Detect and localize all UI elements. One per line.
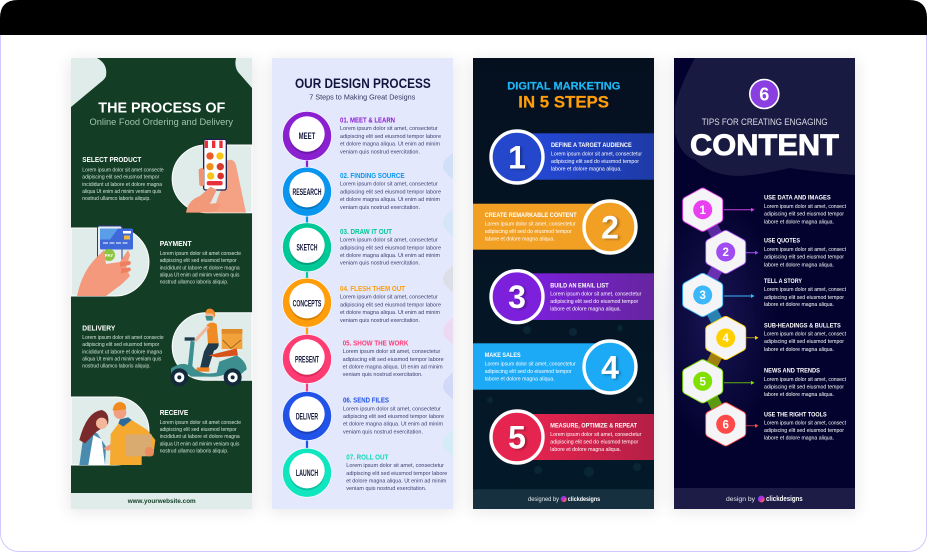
step text: payment: adipiscing elit sed eiusmod tempor — [160, 258, 237, 264]
step 2: RESEARCH — [292, 187, 322, 198]
tip 1 — [687, 193, 846, 227]
tip 6: adipiscing elit sed eiusmod tempor — [764, 428, 844, 434]
step 5 band: Lorem ipsum dolor sit amet, consectetur — [550, 432, 641, 438]
connectors — [306, 155, 308, 455]
step text: receive: incididunt ut labore et dolore magna — [160, 434, 240, 440]
tip 1: Lorem ipsum dolor sit amet, consect — [764, 204, 846, 210]
step 5 band: MEASURE, OPTIMIZE & REPEAT — [550, 423, 637, 430]
title: CONTENT — [690, 129, 839, 162]
step 4 band — [473, 341, 636, 393]
step 6: adipiscing elit sed eiusmod tempor labore — [343, 414, 444, 420]
step text: select product: nostrud ullamco laboris aliquip. — [82, 196, 151, 202]
step 5 band: 5 — [508, 420, 526, 456]
illustration: phone with food menu — [172, 139, 252, 213]
step 3 band: labore et dolore magna aliqua. — [550, 307, 621, 313]
tip 2: labore et dolore magna aliqua. — [764, 262, 834, 268]
step 3 band — [491, 271, 654, 323]
panel: digital marketing — [473, 58, 654, 509]
step 4: CONCEPTS — [293, 298, 321, 310]
illustration: delivery scooter — [170, 309, 252, 386]
title — [90, 100, 234, 127]
step text: payment: Lorem ipsum dolor sit amet consecte — [160, 251, 241, 257]
step 5 band: adipiscing elit sed do eiusmod tempor — [550, 439, 638, 445]
step text: receive — [160, 410, 241, 454]
step 3: et dolore magna aliqua. Ut enim ad minim — [340, 253, 441, 259]
step 1: MEET — [299, 131, 315, 142]
tip 5: labore et dolore magna aliqua. — [764, 392, 834, 398]
step 4 band: 4 — [601, 350, 619, 386]
step text: payment: nostrud ullamco laboris aliquip. — [160, 280, 228, 286]
step 3: adipiscing elit sed eiusmod tempor labore — [340, 246, 441, 252]
step text: select product — [82, 157, 164, 202]
tip 2: Lorem ipsum dolor sit amet, consect — [764, 247, 846, 253]
step text: select product: SELECT PRODUCT — [82, 157, 142, 164]
step 1 band: labore et dolore magna aliqua. — [551, 167, 622, 173]
tip 2: adipiscing elit sed eiusmod tempor — [764, 255, 844, 261]
tip 4: Lorem ipsum dolor sit amet, consect — [764, 332, 846, 338]
tip 3 — [687, 278, 846, 312]
title: DIGITAL MARKETING — [507, 80, 620, 92]
step 7: 07. ROLL OUT — [346, 452, 389, 461]
tip 6: labore et dolore magna aliqua. — [764, 436, 834, 442]
tip 6: USE THE RIGHT TOOLS — [764, 411, 827, 418]
step text: select product: aliqua Ut enim ad minim veniam quis — [82, 189, 162, 195]
step 6: veniam quis nostrud exercitation. — [343, 429, 423, 435]
tip 4: adipiscing elit sed eiusmod tempor — [764, 339, 844, 345]
step 2 band — [473, 201, 636, 253]
tip 5: NEWS AND TRENDS — [764, 368, 821, 375]
step 1: adipiscing elit sed eiusmod tempor labore — [340, 134, 441, 140]
tip 4: SUB-HEADINGS & BULLETS — [764, 323, 841, 330]
tip 3: TELL A STORY — [764, 278, 802, 285]
step text: delivery: adipiscing elit sed eiusmod tempor — [82, 342, 159, 348]
step 3 band: 3 — [508, 279, 526, 315]
step text: delivery: nostrud ullamco laboris aliquip. — [82, 364, 151, 370]
tip 2: 2 — [722, 247, 729, 259]
step 6: Lorem ipsum dolor sit amet, consectetur — [343, 406, 441, 412]
panel: content tips — [653, 58, 855, 509]
step 3: 03. DRAW IT OUT — [340, 227, 393, 236]
panel: food ordering process — [71, 58, 252, 509]
title: THE PROCESS OF — [98, 100, 225, 116]
step 2: 02. FINDING SOURCE — [340, 171, 405, 180]
tip 6 — [710, 407, 846, 442]
title: TIPS FOR CREATING ENGAGING — [702, 117, 828, 127]
step 1 — [282, 112, 441, 160]
step text: receive: Lorem ipsum dolor sit amet consecte — [160, 420, 241, 426]
step 1 band: Lorem ipsum dolor sit amet, consectetur — [551, 151, 642, 157]
step 5: veniam quis nostrud exercitation. — [343, 372, 423, 378]
tip 2: USE QUOTES — [764, 238, 800, 245]
step 6: DELIVER — [296, 411, 318, 422]
step text: payment: incididunt ut labore et dolore magna — [160, 266, 240, 272]
step 1 band: 1 — [508, 140, 526, 176]
tip 2 — [710, 235, 846, 269]
footer: designed by: designed by — [528, 497, 559, 503]
step 6 — [282, 392, 444, 440]
step 2: adipiscing elit sed eiusmod tempor labore — [340, 190, 441, 196]
tip 1: 1 — [699, 205, 706, 217]
step 7: LAUNCH — [296, 468, 318, 479]
step 1 band: adipiscing elit sed do eiusmod tempor — [551, 159, 639, 165]
step 4: veniam quis nostrud exercitation. — [340, 318, 420, 324]
badge: number 6 — [750, 80, 779, 108]
step 2 band: labore et dolore magna aliqua. — [485, 237, 555, 243]
footer: design by: clickdesigns — [766, 496, 803, 503]
step 1: et dolore magna aliqua. Ut enim ad minim — [340, 142, 441, 148]
step 1: 01. MEET & LEARN — [340, 115, 395, 124]
step 2 — [282, 167, 441, 216]
step 1: veniam quis nostrud exercitation. — [340, 149, 420, 155]
step 1: Lorem ipsum dolor sit amet, consectetur — [340, 126, 438, 132]
tip 3: adipiscing elit sed eiusmod tempor — [764, 295, 844, 301]
title: 7 Steps to Making Great Designs — [309, 92, 416, 101]
step text: select product: incididunt ut labore et dolore magna — [82, 182, 162, 188]
footer: website — [71, 493, 252, 509]
step text: receive: RECEIVE — [160, 410, 189, 417]
footer: designed by: clickdesigns — [568, 496, 601, 503]
step 2: Lorem ipsum dolor sit amet, consectetur — [340, 182, 438, 188]
step text: payment — [160, 241, 241, 286]
tip 3: Lorem ipsum dolor sit amet, consect — [764, 287, 846, 293]
step 4 band: MAKE SALES — [485, 352, 521, 359]
step 4: et dolore magna aliqua. Ut enim ad minim — [340, 310, 441, 316]
step text: payment: PAYMENT — [160, 241, 192, 248]
tip 1: USE DATA AND IMAGES — [764, 195, 831, 202]
step 1 band — [491, 131, 654, 183]
tip 5: 5 — [699, 376, 706, 388]
step 7: Lorem ipsum dolor sit amet, consectetur — [346, 463, 444, 469]
step 5 band — [491, 411, 654, 463]
hexagon connectors — [703, 210, 726, 424]
step 7: et dolore magna aliqua. Ut enim ad minim — [346, 479, 447, 485]
tip 4 — [710, 321, 846, 355]
step text: delivery: aliqua Ut enim ad minim veniam quis — [82, 356, 162, 362]
tip 4: 4 — [722, 333, 729, 345]
illustration: card payment on phone — [71, 226, 149, 296]
step text: receive: nostrud ullamco laboris aliquip. — [160, 448, 228, 454]
step 3 band: Lorem ipsum dolor sit amet, consectetur — [550, 292, 641, 298]
step text: delivery: Lorem ipsum dolor sit amet consecte — [82, 335, 164, 341]
tip 6: 6 — [722, 419, 729, 431]
step 4 band: labore et dolore magna aliqua. — [485, 377, 555, 383]
footer: design by: design by — [726, 496, 756, 503]
step 5: PRESENT — [295, 354, 319, 366]
step text: receive: aliqua Ut enim ad minim veniam quis — [160, 441, 240, 447]
tip 5 — [687, 364, 846, 398]
step 5: adipiscing elit sed eiusmod tempor labore — [343, 357, 444, 363]
step text: select product: Lorem ipsum dolor sit amet consecte — [82, 168, 164, 174]
step text: delivery: incididunt ut labore et dolore magna — [82, 349, 162, 355]
title: OUR DESIGN PROCESS — [295, 76, 431, 91]
tip 1: labore et dolore magna aliqua. — [764, 219, 834, 225]
tip 3: 3 — [699, 290, 706, 302]
badge: number 6: 6 — [759, 84, 769, 104]
step 5 — [282, 334, 444, 384]
step 3: Lorem ipsum dolor sit amet, consectetur — [340, 238, 438, 244]
step 2 band: 2 — [601, 210, 619, 246]
step 7: adipiscing elit sed eiusmod tempor labore — [346, 471, 447, 477]
step 3: SKETCH — [296, 242, 318, 254]
step 2 band: CREATE REMARKABLE CONTENT — [485, 212, 577, 219]
step 4 band: adipiscing elit sed do eiusmod tempor — [485, 369, 572, 375]
title — [507, 80, 620, 111]
tip 4: labore et dolore magna aliqua. — [764, 347, 834, 353]
step text: receive: adipiscing elit sed eiusmod tempor — [160, 427, 237, 433]
step 2: et dolore magna aliqua. Ut enim ad minim — [340, 197, 441, 203]
footer: designed by — [473, 489, 654, 509]
panel: design process — [272, 58, 453, 509]
step text: delivery: DELIVERY — [82, 326, 116, 333]
tip 3: labore et dolore magna aliqua. — [764, 302, 834, 308]
illustration: card payment on phone: PAY — [105, 253, 113, 258]
step 2: veniam quis nostrud exercitation. — [340, 205, 420, 211]
illustration: courier handing parcel to customer — [71, 397, 155, 465]
step 5: 05. SHOW THE WORK — [343, 338, 409, 347]
step 5: Lorem ipsum dolor sit amet, consectetur — [343, 349, 441, 355]
footer: website: www.yourwebsite.com — [127, 498, 196, 505]
tip 5: adipiscing elit sed eiusmod tempor — [764, 385, 844, 391]
title — [295, 76, 431, 101]
step 2 band: Lorem ipsum dolor sit amet, consectetur — [485, 221, 576, 227]
tip 6: Lorem ipsum dolor sit amet, consect — [764, 420, 846, 426]
step text: select product: adipiscing elit sed eiusmod tempor — [82, 175, 159, 181]
step 5 band: labore et dolore magna aliqua. — [550, 447, 621, 453]
step 7 — [282, 448, 447, 497]
footer: design by — [674, 488, 855, 509]
step 3: veniam quis nostrud exercitation. — [340, 261, 420, 267]
title: Online Food Ordering and Delivery — [90, 117, 234, 127]
step text: delivery — [82, 326, 164, 370]
step 2 band: adipiscing elit sed do eiusmod tempor — [485, 229, 572, 235]
step 4 — [282, 278, 441, 327]
step 6: et dolore magna aliqua. Ut enim ad minim — [343, 422, 444, 428]
tip 1: adipiscing elit sed eiusmod tempor — [764, 212, 844, 218]
step 3 band: BUILD AN EMAIL LIST — [550, 282, 609, 289]
tip 5: Lorem ipsum dolor sit amet, consect — [764, 377, 846, 383]
step 4: Lorem ipsum dolor sit amet, consectetur — [340, 295, 438, 301]
step 4 band: Lorem ipsum dolor sit amet, consectetur — [485, 361, 576, 367]
step 7: veniam quis nostrud exercitation. — [346, 486, 426, 492]
step 5: et dolore magna aliqua. Ut enim ad minim — [343, 365, 443, 371]
step 3 — [282, 223, 441, 272]
step text: payment: aliqua Ut enim ad minim veniam quis — [160, 272, 240, 278]
step 4: 04. FLESH THEM OUT — [340, 284, 406, 293]
step 3 band: adipiscing elit sed do eiusmod tempor — [550, 299, 638, 305]
step 1 band: DEFINE A TARGET AUDIENCE — [551, 142, 632, 149]
title: IN 5 STEPS — [518, 92, 609, 111]
step 6: 06. SEND FILES — [343, 396, 389, 405]
step 4: adipiscing elit sed eiusmod tempor labore — [340, 303, 441, 309]
